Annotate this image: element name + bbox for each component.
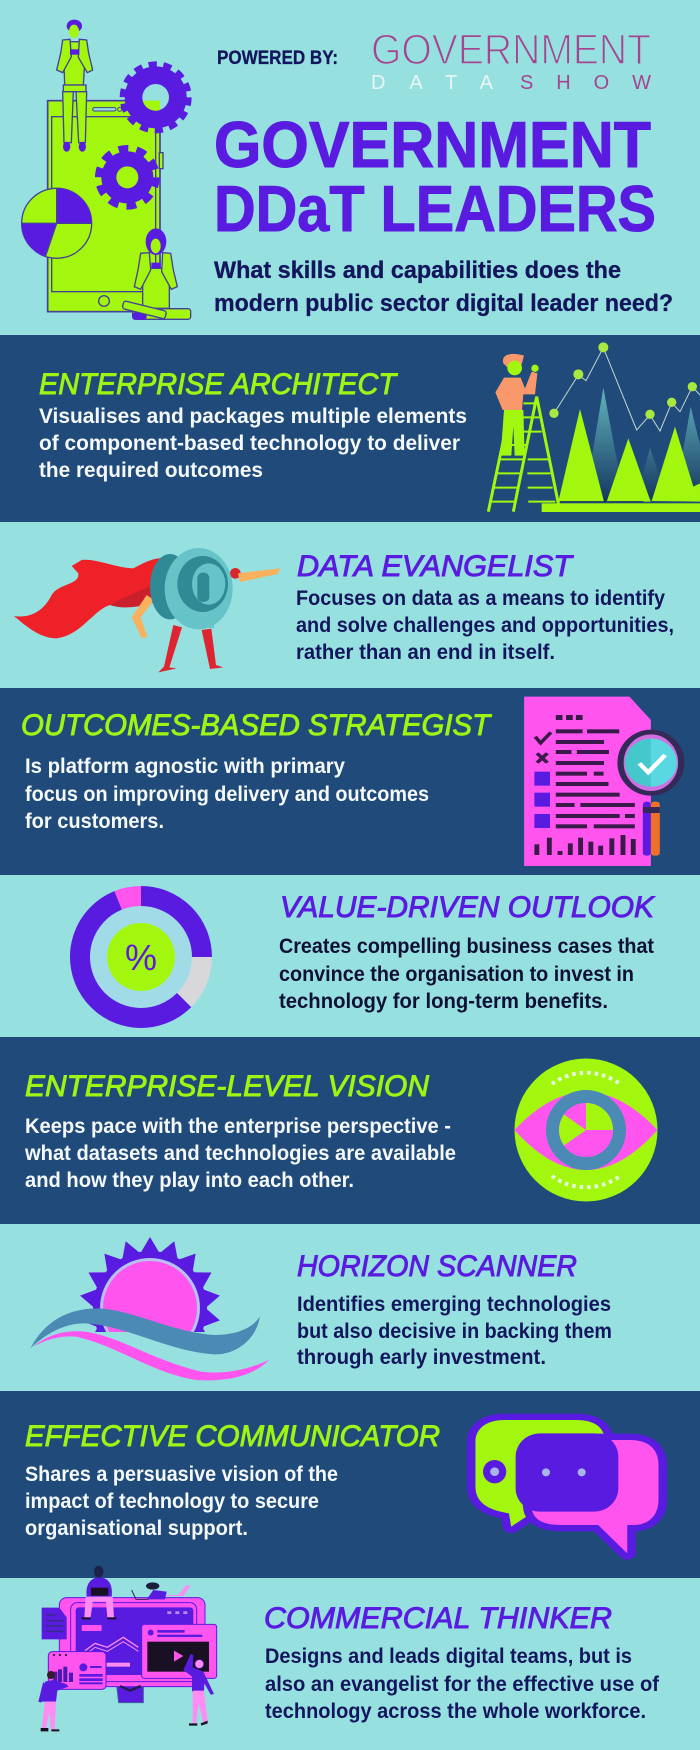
text: horizon scanner description: Identifies emerging technologies [297, 1293, 611, 1316]
text: data evangelist description: rather than an end in itself. [296, 641, 555, 664]
text: data evangelist description: and solve challenges and opportunities, [296, 614, 674, 637]
illustration: person on ladder with mountain chart [488, 342, 700, 512]
text: enterprise architect description: Visualises and packages multiple elements [39, 405, 467, 428]
logo: Government Data Show: GOVERNMENT [371, 26, 651, 74]
subtitle [214, 257, 673, 317]
text: commercial thinker description: also an evangelist for the effective use of [265, 1673, 660, 1696]
text: commercial thinker description: technology across the whole workforce. [265, 1700, 646, 1723]
text: value-driven outlook description [279, 935, 654, 1013]
title [214, 108, 656, 245]
text: value-driven outlook description: convince the organisation to invest in [279, 963, 634, 986]
icon: eye with pie chart [514, 1058, 658, 1202]
illustration: sun over waves [30, 1237, 269, 1380]
subtitle: What skills and capabilities does the [214, 257, 621, 284]
text: enterprise architect description: of component-based technology to deliver [39, 432, 460, 455]
text: effective communicator description [25, 1463, 338, 1540]
panel: outcomes-based strategist [0, 688, 700, 875]
illustration: team around digital screens [38, 1566, 217, 1731]
illustration: at-sign superhero with cape [14, 548, 280, 672]
panel: horizon scanner [30, 1237, 611, 1380]
chart: percentage donut: % [125, 937, 157, 978]
text: enterprise architect description: the required outcomes [39, 459, 263, 482]
text: effective communicator description: organisational support. [25, 1517, 248, 1540]
title: GOVERNMENT [214, 108, 651, 181]
text: value-driven outlook description: Creates compelling business cases that [279, 935, 654, 958]
text: horizon scanner description: through early investment. [297, 1346, 546, 1369]
text: effective communicator description: Shares a persuasive vision of the [25, 1463, 338, 1486]
text: value-driven outlook description: technology for long-term benefits. [279, 990, 608, 1013]
illustration: document with magnifying glass [524, 697, 681, 866]
panel: enterprise architect [0, 335, 700, 522]
text: data evangelist description: Focuses on data as a means to identify [296, 587, 665, 610]
panel: effective communicator [0, 1391, 700, 1578]
icon: speech bubbles [475, 1420, 658, 1553]
text: outcomes-based strategist description: for customers. [25, 810, 164, 833]
text: effective communicator description: impact of technology to secure [25, 1490, 319, 1513]
subtitle: modern public sector digital leader need? [214, 290, 673, 317]
title: DDaT LEADERS [214, 172, 656, 245]
panel: value-driven outlook [0, 875, 700, 1037]
logo: Government Data Show [371, 26, 651, 94]
text: enterprise-level vision description: Keeps pace with the enterprise perspective - [25, 1115, 451, 1138]
panel: data evangelist [0, 522, 700, 688]
heading: outcomes-based strategist: OUTCOMES-BASED STRATEGIST [21, 709, 493, 742]
text: horizon scanner description: but also decisive in backing them [297, 1320, 612, 1343]
text: commercial thinker description [265, 1645, 660, 1723]
heading: horizon scanner: HORIZON SCANNER [297, 1250, 577, 1283]
text: data evangelist description [296, 587, 674, 664]
illustration: phone, gears and people [22, 20, 191, 320]
heading: data evangelist: DATA EVANGELIST [297, 550, 575, 583]
chart: percentage donut [80, 896, 202, 1018]
panel: header [0, 0, 700, 335]
powered by label: POWERED BY: [217, 48, 338, 69]
heading: value-driven outlook: VALUE-DRIVEN OUTLOOK [280, 891, 656, 924]
logo: Government Data Show: DATA [371, 72, 494, 94]
text: outcomes-based strategist description [25, 755, 429, 833]
text: outcomes-based strategist description: focus on improving delivery and outcomes [25, 783, 429, 806]
text: enterprise architect description [39, 405, 467, 482]
text: enterprise-level vision description [24, 1115, 456, 1192]
heading: effective communicator: EFFECTIVE COMMUNICATOR [25, 1420, 440, 1453]
panel: enterprise-level vision [0, 1037, 700, 1224]
text: horizon scanner description [297, 1293, 612, 1369]
text: enterprise-level vision description: and how they play into each other. [25, 1169, 354, 1192]
panel: commercial thinker [0, 1566, 700, 1750]
heading: enterprise architect: ENTERPRISE ARCHITECT [39, 368, 399, 401]
logo: Government Data Show: SHOW [520, 72, 651, 94]
heading: enterprise-level vision: ENTERPRISE-LEVEL VISION [25, 1070, 429, 1103]
text: commercial thinker description: Designs and leads digital teams, but is [265, 1645, 632, 1668]
text: enterprise-level vision description: what datasets and technologies are available [24, 1142, 456, 1165]
heading: commercial thinker: COMMERCIAL THINKER [264, 1602, 612, 1635]
text: outcomes-based strategist description: Is platform agnostic with primary [25, 755, 345, 778]
